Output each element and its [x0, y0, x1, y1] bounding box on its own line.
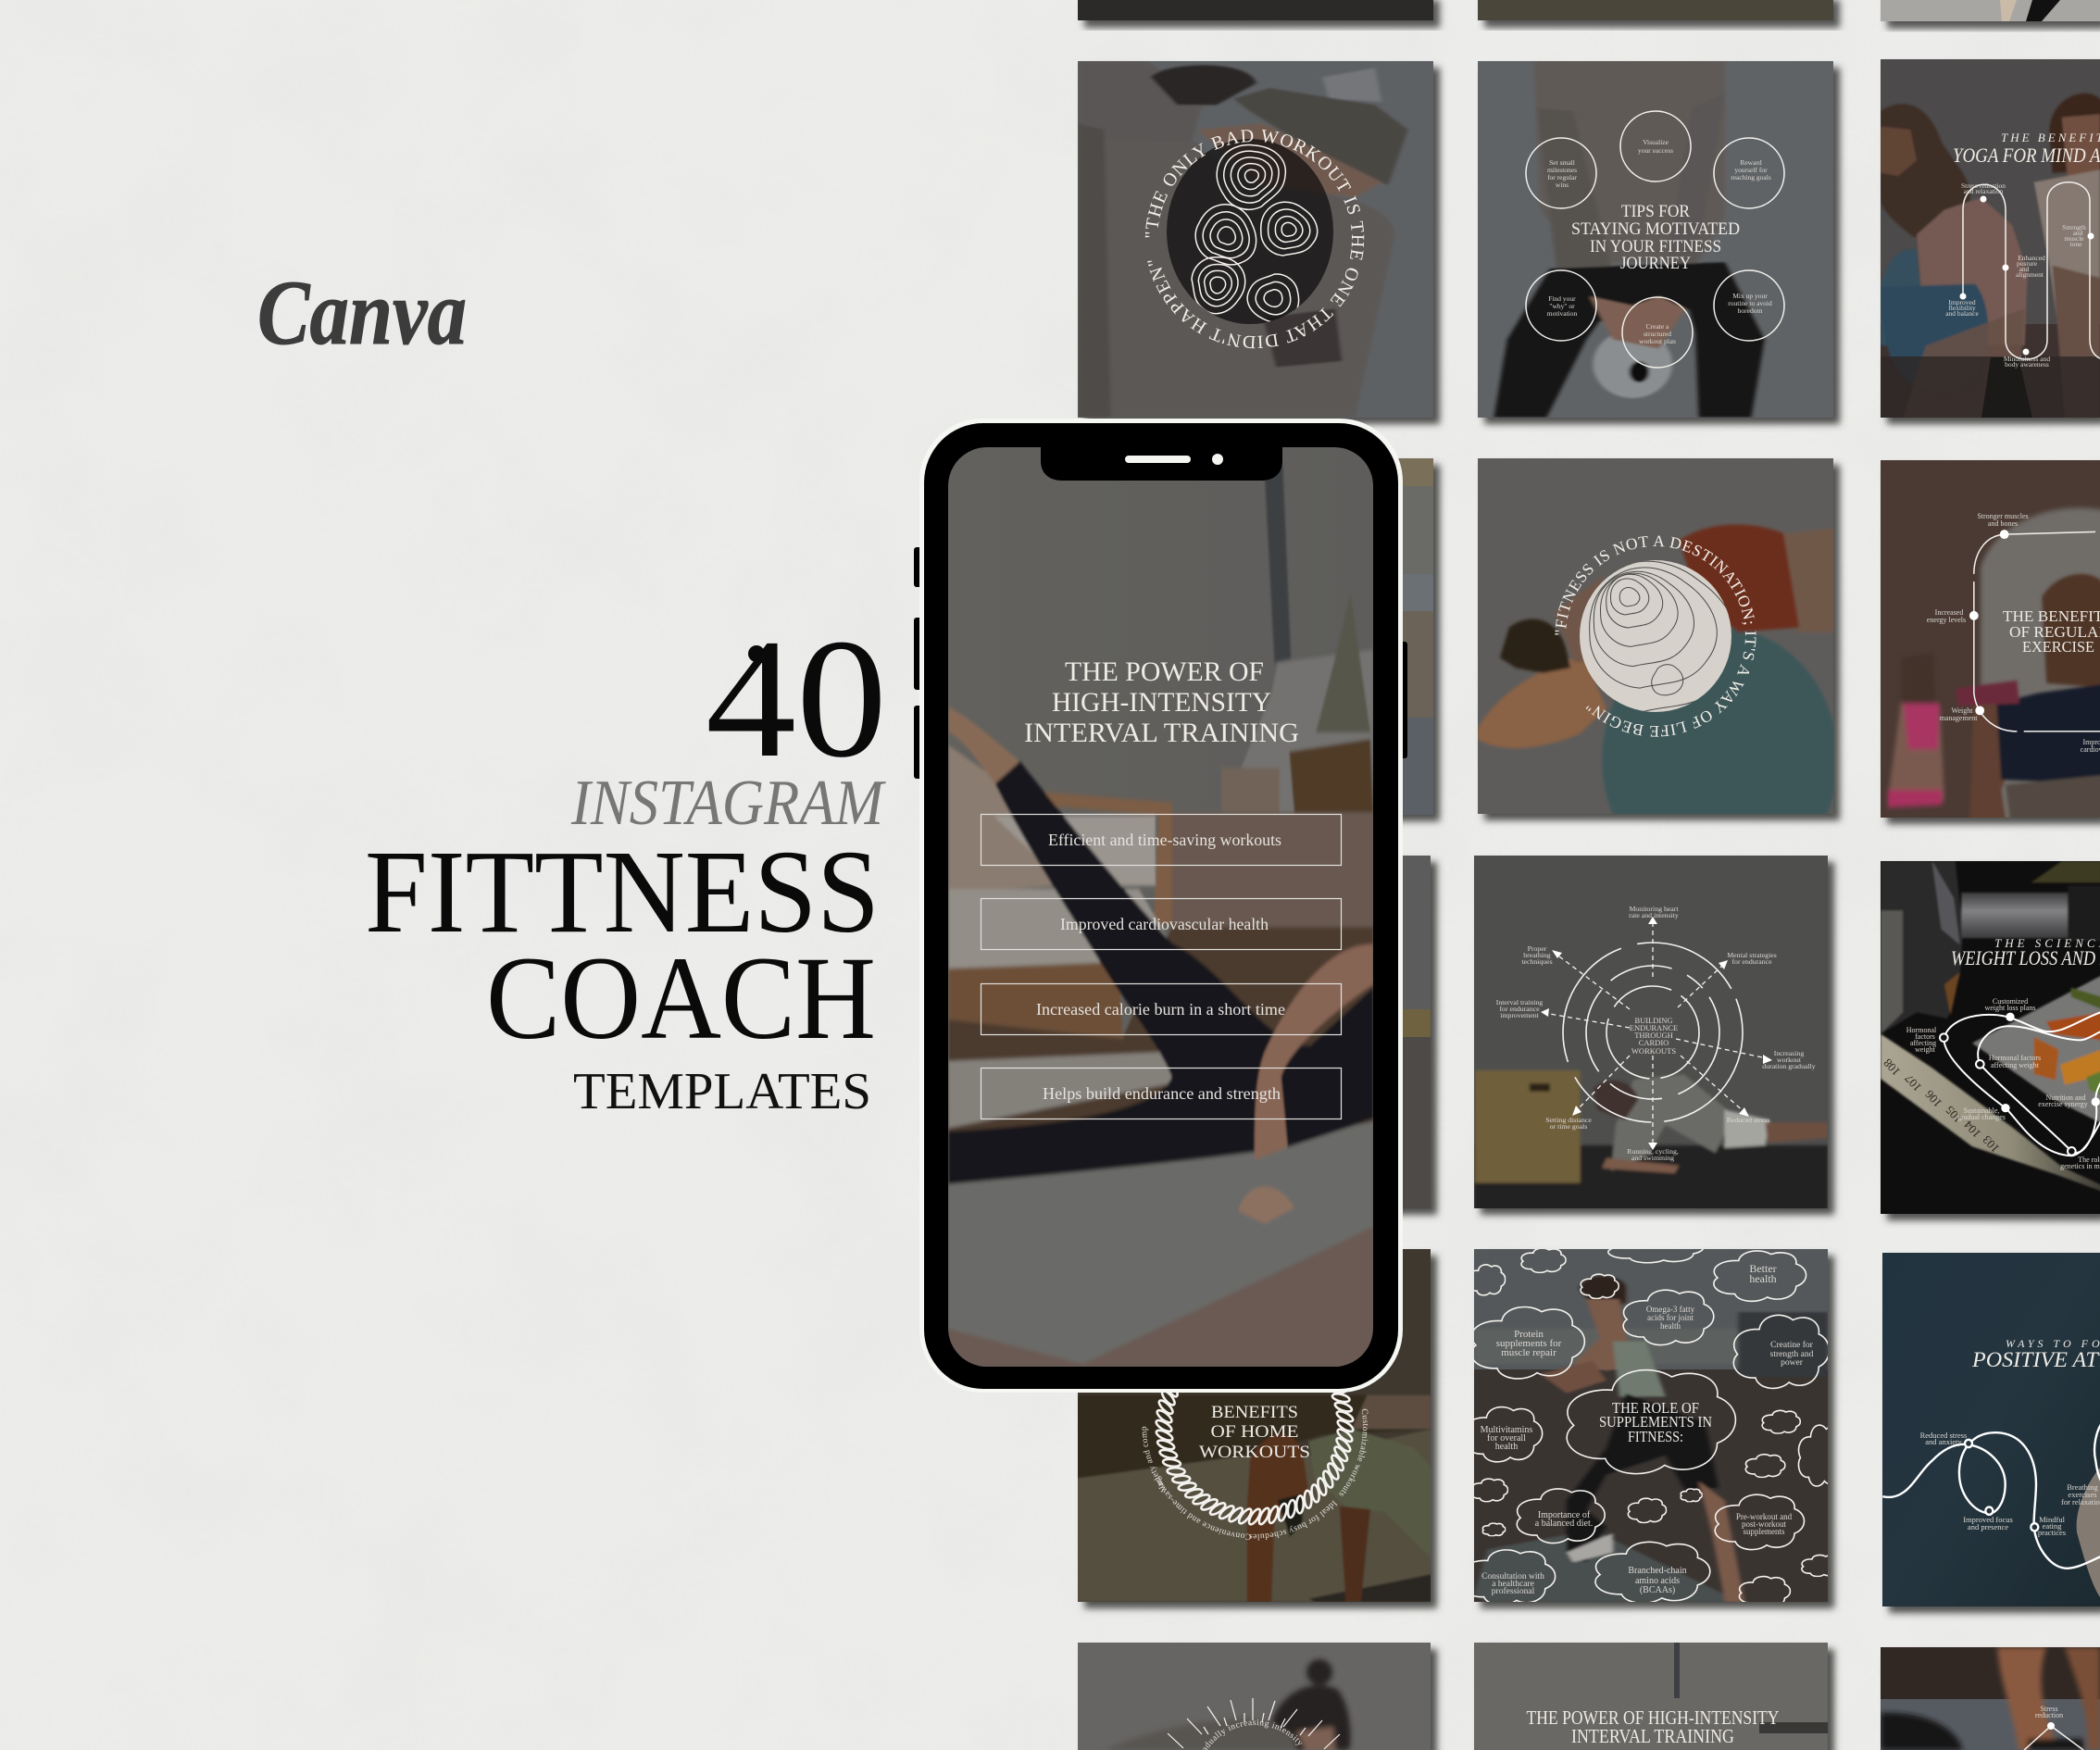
logo: Canva wordmark: Canva [257, 261, 467, 364]
tip labels [1547, 138, 1772, 345]
screen title: HIGH-INTENSITY [1052, 687, 1271, 718]
line labels: energy levels [1927, 616, 1966, 624]
heading line: Instagram: INSTAGRAM [570, 768, 886, 839]
phone screen [948, 447, 1373, 1370]
center title: BUILDING [1634, 1016, 1673, 1025]
tip labels: wins [1556, 181, 1569, 189]
cloud labels: Pre-workout and [1736, 1512, 1793, 1521]
tip labels: for regular [1547, 173, 1577, 181]
icon: contour circle [1580, 560, 1731, 712]
card title: WORKOUTS [1199, 1443, 1310, 1462]
loop labels: and [2019, 265, 2030, 273]
cloud labels: a healthcare [1492, 1580, 1534, 1589]
line labels: Increased [1935, 608, 1963, 617]
loop labels: and relaxation [1964, 187, 2004, 195]
cloud labels: acids for joint [1647, 1313, 1694, 1322]
tip labels: Mix up your [1732, 292, 1768, 300]
node labels: Customized [1993, 997, 2028, 1006]
tip labels: boredom [1738, 306, 1762, 315]
diagram labels: Setting distance [1545, 1116, 1592, 1124]
diagram labels: for endurance [1731, 957, 1772, 966]
cloud labels: health [1660, 1321, 1681, 1331]
ring labels [1143, 1409, 1369, 1541]
card title [1526, 1706, 1780, 1747]
node labels: eating [2043, 1521, 2062, 1531]
tip labels: structured [1644, 330, 1671, 338]
heading line: Templates: TEMPLATES [573, 1063, 871, 1120]
center title: THROUGH [1634, 1031, 1673, 1040]
card: benefits of regular exercise [1881, 460, 2100, 824]
node labels: Improved focus [1963, 1515, 2013, 1524]
tip labels: Set small [1549, 158, 1575, 167]
cloud labels: strength and [1770, 1350, 1814, 1359]
ring arcs [1563, 943, 1743, 1122]
screen title: INTERVAL TRAINING [1024, 718, 1299, 748]
arrow heads [1541, 917, 1772, 1150]
screen title [1024, 656, 1299, 748]
node labels [1920, 1431, 2100, 1537]
node labels: Reduced stress [1920, 1431, 1967, 1440]
loop labels: Improved [1948, 298, 1976, 306]
loop labels: alignment [2016, 270, 2044, 279]
diagram labels: breathing [1523, 951, 1551, 959]
loop labels: body awareness [2005, 360, 2049, 369]
card: building endurance radial diagram [1474, 856, 1834, 1215]
loop labels: flexibility [1948, 304, 1976, 312]
loop labels: and [2073, 229, 2083, 237]
phone side buttons [914, 547, 1407, 779]
card: role of supplements [1463, 1232, 1844, 1608]
card title: IN YOUR FITNESS [1590, 237, 1721, 256]
diagram labels: duration gradually [1762, 1062, 1816, 1070]
tip labels: routine to avoid [1728, 299, 1772, 307]
tip labels: milestones [1547, 166, 1577, 174]
card title: FITNESS: [1628, 1428, 1683, 1445]
card title: THE POWER OF HIGH-INTENSITY [1526, 1706, 1780, 1729]
diagram labels: improvement [1500, 1011, 1540, 1019]
card title [2003, 611, 2100, 652]
heading number: 40: 40 [706, 604, 887, 793]
tip labels: Create a [1646, 322, 1669, 331]
card: benefits of yoga [1881, 59, 2100, 469]
card: tips for staying motivated [1478, 61, 1840, 424]
line labels: and bones [1988, 519, 2018, 528]
card title: INTERVAL TRAINING [1571, 1725, 1734, 1747]
node labels: gradual changes [1957, 1113, 2006, 1121]
diagram labels: workout [1777, 1056, 1802, 1064]
loop line [1959, 182, 2100, 359]
diagram labels: Mental strategies [1727, 951, 1777, 959]
cloud labels: health [1495, 1442, 1518, 1452]
card: positive attitude [1882, 1253, 2100, 1613]
diagram labels: Interval training [1496, 998, 1543, 1006]
card: partly hidden floor photo [1078, 856, 1437, 1215]
cloud labels: Branched-chain [1628, 1566, 1687, 1576]
benefit box: efficient [981, 815, 1341, 865]
tip labels: reaching goals [1731, 173, 1771, 181]
cloud labels: for overall [1487, 1433, 1526, 1444]
heading line: Fittness: FITTNESS [365, 826, 880, 957]
ring labels: Variety and compact [1143, 1426, 1165, 1493]
diagram labels: techniques [1521, 957, 1553, 966]
cloud labels: muscle repair [1501, 1347, 1556, 1358]
card title: SUPPLEMENTS IN [1599, 1413, 1712, 1431]
cloud outlines [1463, 1232, 1844, 1607]
card title: EXERCISE [2022, 638, 2094, 656]
cloud labels: a balanced diet. [1535, 1519, 1593, 1529]
tip labels: Reward [1740, 158, 1762, 167]
benefit box: calorie burn: Increased calorie burn in a short time [1036, 1000, 1285, 1019]
screen title: THE POWER OF [1065, 656, 1264, 687]
cloud labels: Importance of [1538, 1510, 1591, 1520]
tape numbers: 106 [1922, 1087, 1944, 1110]
loop labels: Mindfulness and [2004, 355, 2050, 363]
card: top row middle, olive floor [1478, 0, 1840, 28]
benefit box: efficient: Efficient and time-saving workouts [1048, 831, 1281, 849]
cloud labels: supplements [1743, 1527, 1785, 1536]
cloud labels: (BCAAs) [1640, 1585, 1675, 1595]
cloud labels: Creatine for [1770, 1340, 1814, 1350]
center title: WORKOUTS [1631, 1046, 1676, 1056]
tape numbers: 103 [1980, 1133, 2002, 1156]
card: stress reduction, bottom right [1881, 1647, 2100, 1750]
card: benefits of home workouts [1078, 1249, 1443, 1614]
node labels: affecting weight [1991, 1061, 2040, 1069]
circular quote text: "THE ONLY BAD WORKOUT IS THE ONE THAT DIDN'T HAPPEN" [1144, 130, 1365, 348]
cloud labels: supplements for [1496, 1338, 1562, 1349]
card: power of high intensity, bottom centre [1474, 1643, 1834, 1750]
loop labels: Enhanced [2018, 254, 2045, 262]
benefit box: endurance [981, 1069, 1341, 1119]
rope ring [1155, 1369, 1355, 1526]
node label [2035, 1705, 2063, 1719]
loop labels: Strength [2062, 223, 2086, 231]
card title [1951, 936, 2100, 969]
diagram labels: Increasing [1774, 1049, 1804, 1057]
card: science behind weight loss [1881, 861, 2100, 1220]
flowing line with nodes [1882, 1419, 2100, 1569]
tape numbers: 105 [1943, 1104, 1965, 1126]
triangle connector [2024, 1722, 2083, 1750]
node labels: Hormonal factors [1989, 1054, 2041, 1062]
loop labels: and balance [1945, 309, 1979, 318]
cloud labels: Omega-3 fatty [1646, 1305, 1695, 1314]
card: fitness is not a destination quote [1478, 458, 1845, 826]
tape numbers [1881, 1056, 2002, 1156]
icon: contour globe [1167, 139, 1333, 329]
ring labels: Ideal for busy schedules [1249, 1500, 1338, 1541]
tip labels: motivation [1547, 309, 1577, 318]
line labels: management [1940, 714, 1978, 722]
diagram labels: Running, cycling, [1627, 1147, 1679, 1156]
node labels: Breathing [2067, 1482, 2099, 1492]
diagram labels: or time goals [1550, 1122, 1587, 1131]
node labels: weight loss plans [1984, 1004, 2036, 1012]
card title: STAYING MOTIVATED [1571, 219, 1740, 239]
dashed arrows [1544, 922, 1767, 1144]
flowing line with nodes [1940, 1011, 2100, 1156]
heading line: Coach: COACH [486, 932, 876, 1064]
node labels: exercise synergy [2038, 1100, 2088, 1108]
cloud labels: Consultation with [1481, 1572, 1544, 1581]
node labels: and anxiety [1925, 1437, 1962, 1446]
sunburst rays [1168, 1698, 1340, 1749]
card title: BENEFITS [1211, 1403, 1298, 1422]
node labels: affecting [1910, 1039, 1936, 1047]
benefit box: endurance: Helps build endurance and strength [1043, 1084, 1281, 1103]
tip labels: "why" or [1549, 302, 1575, 310]
card: only bad workout quote [1078, 61, 1445, 430]
tip circles [1526, 111, 1784, 368]
center title: CARDIO [1639, 1038, 1669, 1047]
tape numbers: 107 [1902, 1071, 1924, 1094]
node labels: Nutrition and [2046, 1094, 2085, 1102]
line labels [1927, 512, 2100, 754]
card title [1954, 133, 2100, 162]
ring labels: Convenience and time-saving [1155, 1476, 1251, 1541]
loop labels: posture [2017, 259, 2038, 268]
card: top row left, textured dark [1078, 0, 1440, 28]
center title [1630, 1016, 1678, 1056]
card: gradually increasing, bottom left [1078, 1643, 1443, 1750]
line labels: Stronger muscles [1977, 512, 2029, 520]
loop labels [1945, 181, 2086, 369]
card title [1971, 1337, 2100, 1371]
diagram labels: rate and intensity [1629, 911, 1679, 919]
tip labels: workout plan [1639, 337, 1676, 345]
ring labels: Customizable workouts [1339, 1409, 1369, 1496]
diagram labels: Proper [1528, 944, 1547, 953]
loop labels: tone [2070, 240, 2082, 248]
cloud labels: Better [1749, 1262, 1777, 1275]
heading: 40 Instagram Fittness Coach Templates [365, 604, 887, 1120]
diagram labels: Reduced stress [1727, 1116, 1769, 1124]
diagram labels [1496, 905, 1816, 1162]
diagram labels: Monitoring heart [1629, 905, 1679, 913]
cloud labels: health [1749, 1272, 1777, 1285]
line labels: Weight [1952, 706, 1973, 715]
tip labels: Visualize [1643, 138, 1669, 146]
node labels: Hormonal [1906, 1026, 1937, 1034]
cloud labels: post-workout [1742, 1519, 1786, 1529]
node labels: exercises [2068, 1490, 2097, 1499]
center title: ENDURANCE [1630, 1023, 1678, 1032]
node label: reduction [2035, 1711, 2063, 1719]
node label: Stress [2040, 1705, 2058, 1713]
card title [1199, 1403, 1310, 1462]
node labels: weight [1915, 1045, 1936, 1054]
cloud labels: Multivitamins [1481, 1425, 1532, 1435]
circular quote text: "FITNESS IS NOT A DESTINATION; IT'S A WAY OF LIFE BEGIN" [1555, 535, 1756, 737]
tip labels: Find your [1548, 294, 1576, 303]
benefit box: cardiovascular: Improved cardiovascular health [1060, 915, 1269, 933]
loop labels: muscle [2064, 234, 2084, 243]
card title: OF HOME [1211, 1422, 1298, 1442]
cloud labels: Protein [1514, 1329, 1544, 1340]
card: partly hidden beach photo [1398, 458, 1445, 827]
cloud labels: amino acids [1635, 1576, 1680, 1586]
diagram labels: and swimming [1631, 1154, 1674, 1162]
card: top row right, legs [1881, 0, 2100, 29]
tip labels: yourself for [1734, 166, 1768, 174]
node labels: Sustainable, [1964, 1106, 1999, 1115]
card title [1599, 1399, 1712, 1445]
benefit box: cardiovascular [981, 898, 1341, 950]
loop labels: Stress reduction [1961, 181, 2006, 190]
node labels: and presence [1968, 1522, 2008, 1531]
cloud labels: professional [1492, 1586, 1535, 1596]
phone mockup [914, 419, 1407, 1393]
tape numbers: 104 [1961, 1118, 1983, 1141]
tip labels: your success [1638, 146, 1673, 155]
diagram labels: for endurance [1499, 1005, 1540, 1013]
node labels: Mindful [2039, 1515, 2066, 1524]
tape numbers: 108 [1881, 1056, 1903, 1079]
node labels: factors [1915, 1032, 1935, 1041]
card title: JOURNEY [1620, 254, 1691, 273]
node labels [1906, 997, 2100, 1170]
card title [1572, 206, 1739, 269]
cloud labels [1481, 1262, 1814, 1596]
card title: TIPS FOR [1621, 202, 1690, 221]
phone body [919, 419, 1403, 1393]
card title: THE ROLE OF [1612, 1399, 1699, 1417]
connector line with arrows [1969, 530, 2100, 731]
phone notch [1041, 444, 1282, 481]
node labels: practices [2038, 1528, 2066, 1537]
cloud labels: power [1781, 1358, 1804, 1368]
benefit box: calorie burn [981, 983, 1341, 1035]
